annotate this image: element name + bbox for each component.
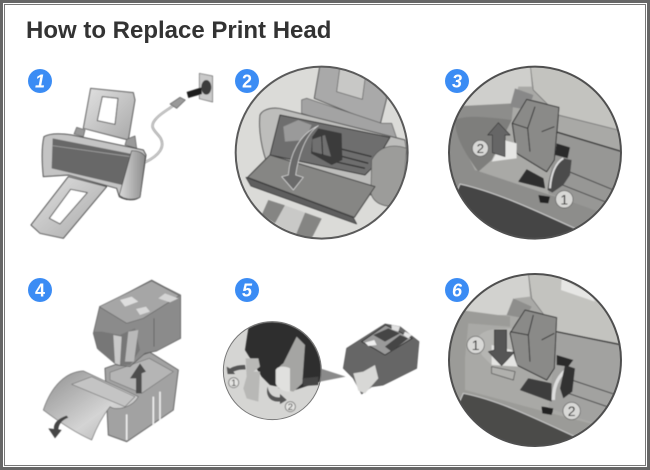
cartridge base [492, 367, 515, 380]
badge 4 [28, 278, 52, 302]
badge 1: 1 [35, 72, 45, 92]
printer rear [302, 98, 398, 143]
label 1: 1 [231, 378, 236, 388]
badge 2 [235, 69, 259, 93]
step 1 illustration: printer plugged into wall socket [31, 73, 213, 238]
arrow 2: up [488, 123, 510, 157]
carriage rail [548, 131, 620, 210]
label 1 [556, 191, 573, 208]
power cord [145, 103, 176, 162]
step 3 illustration: raising the lock lever [448, 63, 625, 247]
front cover dark wedge [458, 183, 576, 238]
pointer wedge [318, 369, 346, 382]
step 4 illustration: print head and package [43, 280, 181, 442]
print head [510, 88, 559, 172]
label 1: 1 [560, 191, 568, 207]
label 2 [563, 402, 580, 420]
badge 5 [235, 278, 259, 302]
label 2: 2 [568, 403, 576, 419]
step 6 illustration: lowering the lock lever [448, 268, 625, 452]
label 1 [229, 378, 239, 388]
printer interior [450, 103, 597, 228]
background tray [466, 275, 618, 344]
step 5 illustration: removing protective parts [223, 322, 419, 420]
badge 3: 3 [452, 72, 462, 92]
print head [507, 298, 557, 380]
badge 6: 6 [452, 280, 463, 300]
output tray [31, 177, 107, 238]
down-left arrow [48, 416, 68, 438]
badge 4: 4 [35, 280, 45, 300]
print head [93, 280, 181, 367]
label 2 [285, 402, 295, 412]
front door [246, 155, 375, 224]
front cover dark wedge [460, 392, 574, 445]
tray wings [74, 127, 137, 148]
step 2 illustration: opening the printer cover [236, 65, 408, 239]
output tray [262, 200, 322, 238]
up arrow [130, 363, 146, 393]
arrow 1: down [488, 330, 514, 366]
background tray [464, 68, 617, 130]
printer body [260, 108, 408, 206]
arrow: open door [282, 126, 318, 190]
label 1: 1 [472, 337, 480, 353]
badge 2: 2 [242, 72, 252, 92]
label 2 [472, 140, 488, 156]
arrow 2 [267, 387, 287, 404]
input tray [314, 65, 388, 125]
print head carriage [311, 128, 342, 165]
magnified head [243, 322, 325, 402]
title: How to Replace Print Head [26, 17, 331, 44]
white ramp [492, 140, 517, 162]
power plug [170, 97, 185, 108]
printer body [42, 134, 146, 200]
badge 6 [445, 278, 469, 302]
small print head [343, 324, 419, 394]
input tray [83, 88, 135, 140]
printer interior [450, 310, 590, 436]
wall socket [187, 73, 213, 102]
badge 1 [28, 69, 52, 93]
white ramp [492, 345, 518, 367]
carriage rail [548, 330, 619, 410]
carriage rails [283, 120, 312, 142]
label 1 [467, 336, 484, 354]
badge 5: 5 [242, 280, 253, 300]
peeled tape [43, 371, 138, 440]
packaging tray [105, 352, 178, 442]
badge 3 [445, 69, 469, 93]
label 2: 2 [477, 141, 484, 156]
label 2: 2 [288, 402, 293, 412]
arrow 1 [227, 365, 246, 374]
magnifier outline [223, 322, 321, 420]
lever [518, 143, 572, 203]
lever [520, 355, 575, 415]
